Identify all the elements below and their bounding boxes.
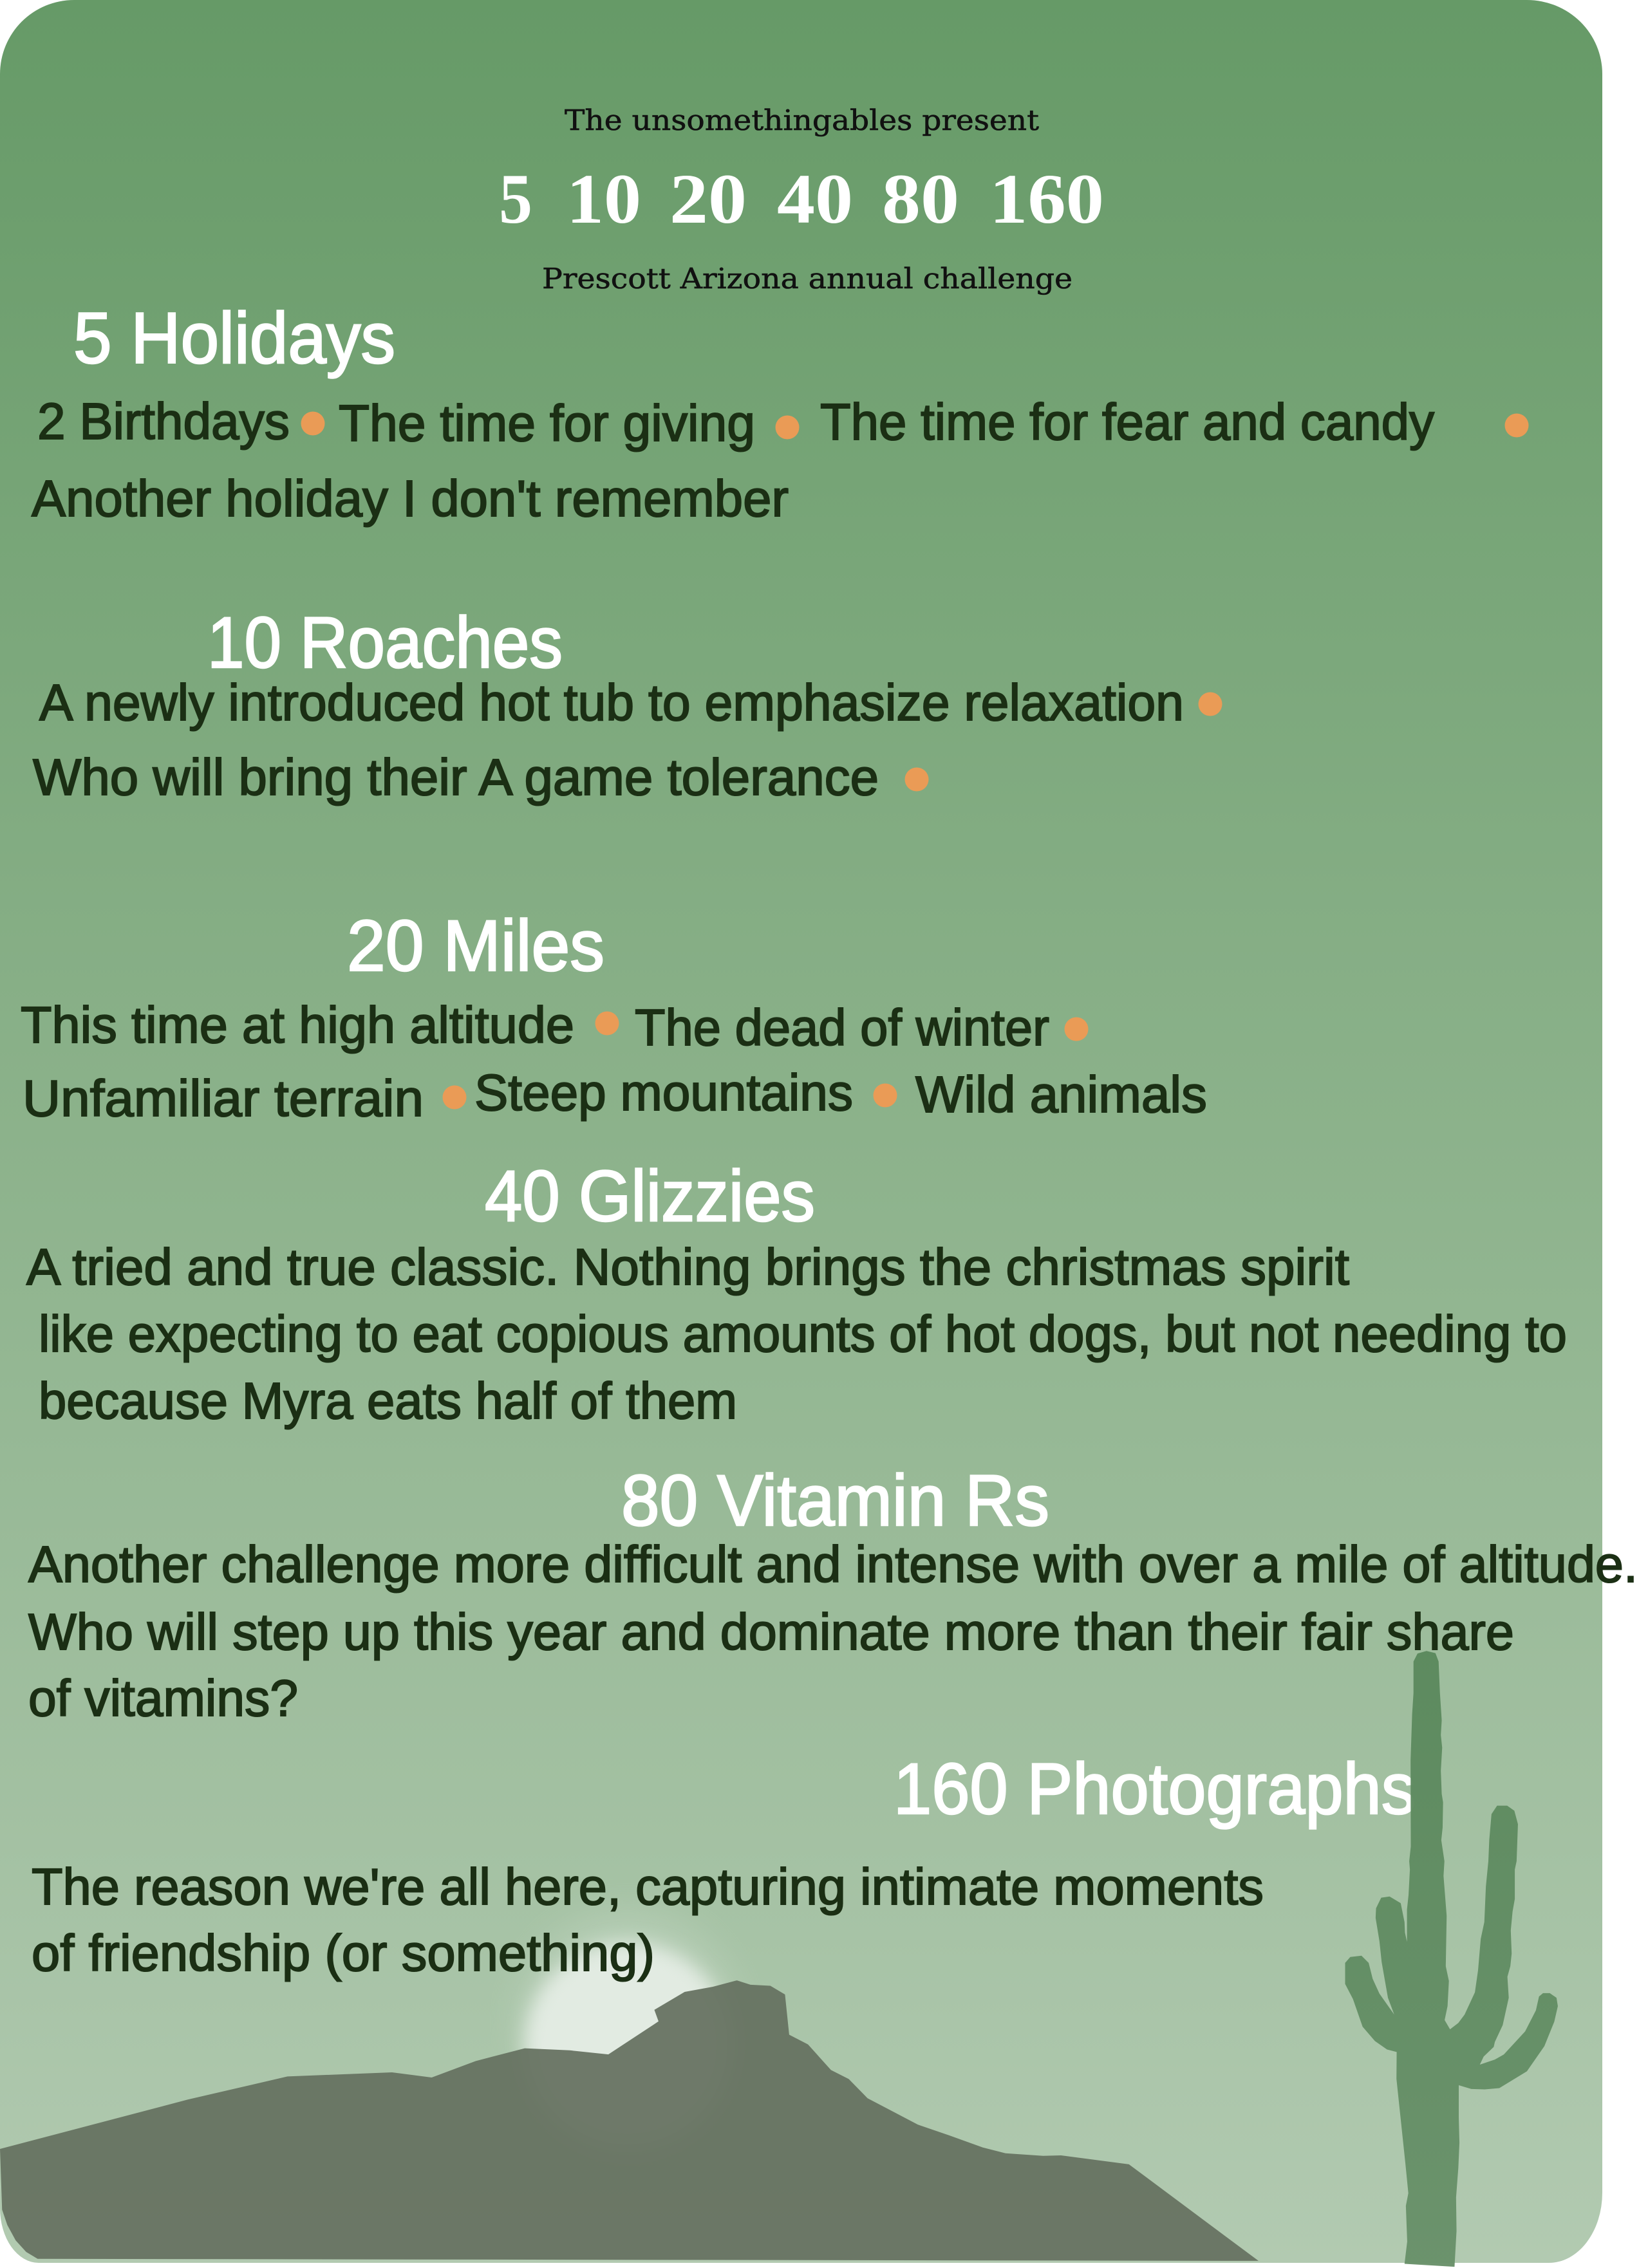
list item: Unfamiliar terrain [23,1070,424,1127]
sun glow behind mountain [518,1911,737,2148]
mountain silhouette [0,1980,1259,2261]
title numbers: 40 [777,160,853,238]
list item: The dead of winter [635,999,1049,1056]
section: 160 Photographs body text [32,1858,1264,1982]
list item: 2 Birthdays [37,393,290,450]
list item: Wild animals [915,1066,1207,1123]
list item: Another holiday I don't remember [32,470,789,527]
heading: 5 Holidays [73,298,395,378]
list item: Who will bring their A game tolerance [33,748,879,806]
body text [26,1238,1567,1429]
title numbers: 5 [499,160,532,238]
cactus silhouette [1345,1651,1558,2267]
list item: Steep mountains [474,1064,853,1121]
body text [28,1536,1638,1727]
body text: Another challenge more difficult and intense with over a mile of altitude. [28,1536,1638,1593]
section: 80 Vitamin Rs [28,1460,1638,1727]
section: 5 Holidays [32,298,1528,527]
subtitle: Prescott Arizona annual challenge [542,263,1072,295]
heading: 20 Miles [347,906,604,986]
title numbers [499,160,1104,238]
bullet [1065,1017,1088,1041]
title numbers: 160 [989,160,1104,238]
bullet [1199,692,1222,716]
list item: This time at high altitude [21,996,574,1054]
bullet [775,416,800,439]
body text: because Myra eats half of them [39,1372,737,1429]
title numbers: 80 [882,160,959,238]
body text: A tried and true classic. Nothing brings the christmas spirit [26,1238,1349,1296]
list item: The time for giving [339,395,755,452]
title numbers: 20 [670,160,747,238]
list item: The time for fear and candy [820,393,1434,451]
title numbers: 10 [567,160,641,238]
bullet [873,1084,897,1107]
bullet [443,1085,466,1110]
bullet [595,1012,619,1035]
section: 40 Glizzies [26,1156,1567,1429]
heading: 160 Photographs [894,1749,1416,1829]
body text: of vitamins? [28,1669,298,1727]
presenter line: The unsomethingables present [565,104,1039,137]
body text: like expecting to eat copious amounts of hot dogs, but not needing to [39,1305,1567,1362]
section: 160 Photographs body text: The reason we're all here, capturing intimate moments [32,1858,1264,1915]
bullet [1505,413,1528,438]
section: 10 Roaches [33,602,1222,806]
section: 160 Photographs body text: of friendship (or something) [32,1924,655,1982]
body text: Who will step up this year and dominate more than their fair share [28,1603,1514,1660]
list item: A newly introduced hot tub to emphasize relaxation [39,674,1184,731]
header block [499,104,1104,295]
bullet [301,412,324,435]
section: 20 Miles [21,906,1207,1127]
heading: 10 Roaches [207,602,563,683]
heading: 40 Glizzies [485,1156,815,1236]
heading: 80 Vitamin Rs [621,1460,1049,1541]
bullet [905,767,928,792]
